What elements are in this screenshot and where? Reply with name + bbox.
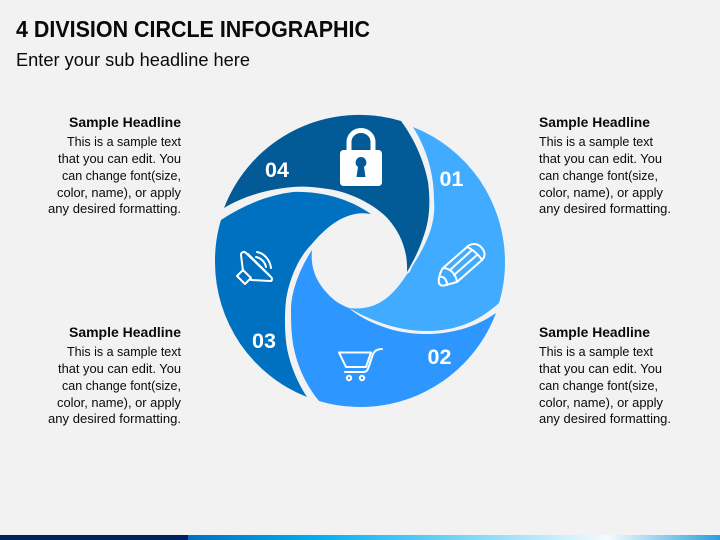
text block: top left: any desired formatting.	[48, 201, 181, 216]
circle diagram	[215, 115, 505, 407]
icon: pencil	[439, 244, 485, 286]
text block: bottom right: color, name), or apply	[539, 395, 663, 410]
text block: top left	[48, 114, 181, 216]
text block: bottom right: can change font(size,	[539, 378, 658, 393]
text block: top right: that you can edit. You	[539, 151, 662, 166]
text block: bottom left: that you can edit. You	[58, 361, 181, 376]
text block: top right: Sample Headline	[539, 114, 650, 130]
text block: top right: This is a sample text	[539, 134, 653, 149]
text block: bottom right: that you can edit. You	[539, 361, 662, 376]
text block: bottom left: can change font(size,	[62, 378, 181, 393]
text block: top left: that you can edit. You	[58, 151, 181, 166]
subtitle: Enter your sub headline here	[16, 50, 250, 70]
text block: top left: color, name), or apply	[57, 185, 181, 200]
segment 04	[224, 115, 429, 272]
text block: top left: This is a sample text	[67, 134, 181, 149]
number 03: 03	[252, 329, 276, 353]
text block: bottom left: any desired formatting.	[48, 411, 181, 426]
number 02: 02	[428, 345, 451, 369]
text block: top right: can change font(size,	[539, 168, 658, 183]
text block: bottom left: Sample Headline	[69, 324, 181, 340]
text block: top right	[539, 114, 671, 216]
text block: bottom left: This is a sample text	[67, 344, 181, 359]
footer gradient bar	[0, 535, 720, 540]
title: 4 DIVISION CIRCLE INFOGRAPHIC	[16, 16, 370, 42]
icon: lock	[340, 130, 382, 186]
text block: top left: can change font(size,	[62, 168, 181, 183]
text block: top left: Sample Headline	[69, 114, 181, 130]
segment 01	[349, 127, 505, 331]
text block: bottom right: This is a sample text	[539, 344, 653, 359]
text block: bottom left	[48, 324, 181, 426]
number 04: 04	[265, 158, 289, 182]
icon: speaker	[237, 252, 272, 284]
text block: bottom right: any desired formatting.	[539, 411, 671, 426]
text block: bottom left: color, name), or apply	[57, 395, 181, 410]
number 01: 01	[440, 167, 463, 191]
segment 02	[291, 250, 496, 407]
text block: top right: any desired formatting.	[539, 201, 671, 216]
segment 03	[215, 192, 371, 397]
icon: shopping cart	[339, 349, 382, 380]
text block: top right: color, name), or apply	[539, 185, 663, 200]
text block: bottom right: Sample Headline	[539, 324, 650, 340]
text block: bottom right	[539, 324, 671, 426]
